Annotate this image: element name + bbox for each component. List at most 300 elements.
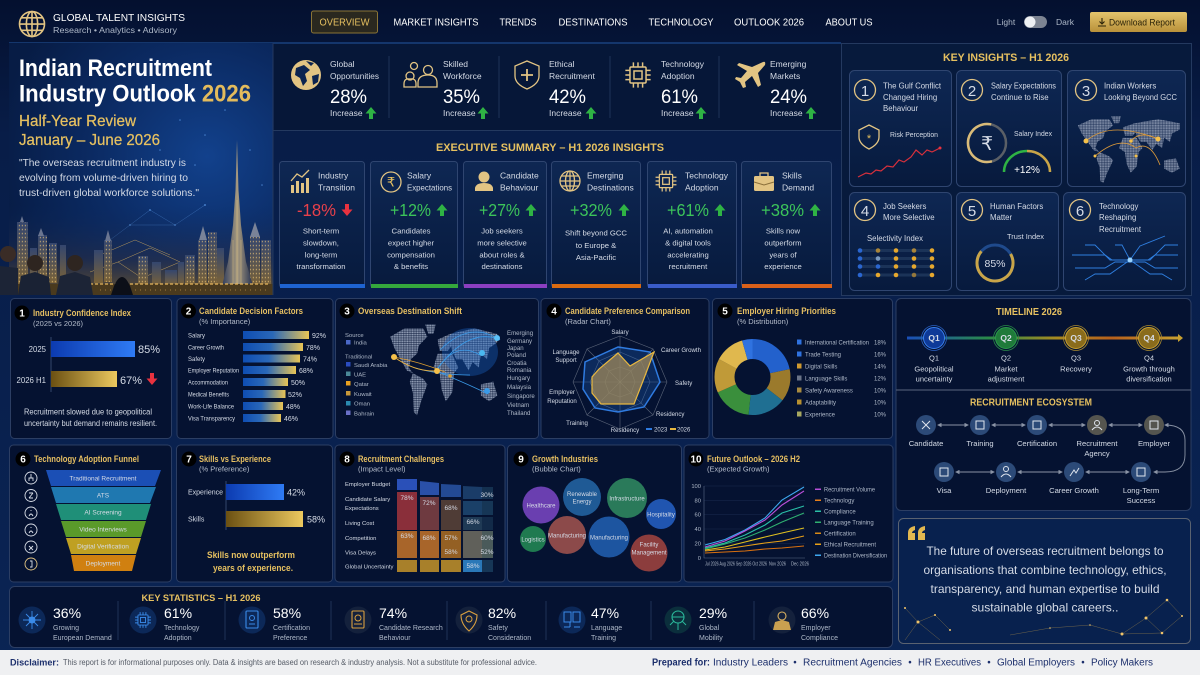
navigation menu: DESTINATIONS (558, 18, 628, 28)
stat: European demand: 36% (53, 605, 81, 621)
prepared for: HR Executives (918, 658, 981, 668)
panel 5: employer hiring priorities: (% Distribution) (737, 317, 789, 326)
panel 10: future outlook: 10 (690, 454, 702, 466)
panel 4: candidate preference comparison: 4 (551, 306, 557, 318)
timeline: Q3 (1070, 333, 1082, 343)
panel 1: industry confidence index: 1 (19, 308, 25, 320)
radar chart: Residency (656, 411, 685, 418)
heatmap bars: 30% (480, 492, 494, 499)
stat: employer compliance: Compliance (801, 635, 838, 642)
insight 6: technology reshaping: Technology (1099, 202, 1139, 211)
timeline: Q1 (929, 354, 939, 362)
exec card: skills demand: experience (764, 262, 802, 271)
line chart legend: Ethical Recruitment (824, 542, 876, 548)
insight 4: job seekers selective: Selectivity Index (867, 234, 923, 243)
stat: global mobility: 29% (699, 605, 727, 621)
donut legend: 14% (874, 364, 887, 370)
timeline heading: TIMELINE 2026 (996, 306, 1062, 318)
KPI: skilled workforce (404, 59, 488, 119)
heatmap bars: 68% (422, 535, 436, 542)
timeline: Market (995, 364, 1018, 374)
funnel stages: Deployment (86, 560, 121, 568)
insight 6: technology reshaping: Recruitment (1099, 225, 1142, 234)
horizontal bars: Medical Benefits (188, 392, 229, 398)
KPI: emerging markets: Emerging (770, 59, 807, 69)
insight 2: salary expectations: Salary Index (1014, 129, 1052, 138)
heatmap bars: 63% (400, 533, 414, 540)
radar chart: Training (566, 420, 588, 427)
funnel icons (25, 472, 37, 570)
ecosystem flow: Training (966, 439, 994, 448)
skills takeaway (207, 550, 295, 574)
panel 4: candidate preference comparison: Candidate Preference Comparison (565, 306, 690, 316)
line chart: 80 (695, 498, 701, 504)
insight 2: salary expectations: +12% (1014, 165, 1040, 176)
exec card: skills demand: +38% (761, 200, 804, 220)
line chart legend: Compliance (824, 510, 856, 516)
theme toggle: Dark (1056, 17, 1075, 27)
hero subtitle: Half-Year Review (19, 113, 136, 130)
ecosystem flow (909, 415, 1185, 505)
ecosystem flow: Visa (937, 486, 952, 495)
donut legend (797, 340, 887, 418)
donut legend: Trade Testing (805, 352, 841, 358)
exec card: salary expectations: Expectations (407, 182, 452, 192)
donut legend: 10% (874, 400, 887, 406)
horizontal bars: Salary (188, 334, 205, 340)
KPI: ethical recruitment: 42% (549, 86, 586, 108)
KPI: technology adoption (625, 59, 706, 119)
insight 4: job seekers selective: Job Seekers (883, 202, 926, 211)
bar 2025 (29, 341, 160, 357)
panel: timeline and ecosystem (896, 298, 1191, 510)
line chart: 40 (695, 527, 701, 533)
radar legend (646, 428, 691, 434)
panel 9: growth industries: 9 (518, 454, 524, 466)
hero subtitle (19, 113, 160, 149)
exec card: technology adoption: AI, automation (663, 226, 713, 236)
KPI: global opportunities (291, 59, 379, 119)
stat: language training: 47% (591, 605, 619, 621)
hero quote (19, 157, 199, 199)
horizontal bars (188, 331, 326, 423)
panel 10: future outlook: Future Outlook – 2026 H2 (707, 454, 800, 464)
line chart: Dec 2026 (791, 562, 809, 568)
ecosystem flow: Employer (1138, 439, 1171, 448)
source legend: Source (345, 333, 364, 339)
navigation menu: MARKET INSIGHTS (394, 18, 479, 28)
emerging list (507, 330, 535, 417)
insight 5: human factors: Human Factors (990, 202, 1043, 211)
timeline (907, 326, 1183, 384)
bubbles: Hospitality (647, 512, 675, 518)
header: logo and brand (20, 12, 185, 36)
timeline: Q3 (1071, 354, 1081, 362)
donut legend: International Certification (805, 340, 869, 346)
horizontal bars: 78% (306, 345, 320, 352)
panel 9: growth industries (508, 445, 682, 582)
emerging list: Thailand (507, 410, 530, 417)
exec card: industry transition: Industry (318, 170, 349, 180)
insight 4: job seekers selective (850, 192, 952, 290)
prepared for: Policy Makers (1091, 658, 1153, 668)
exec card: technology adoption: Adoption (685, 182, 719, 192)
panel 1: industry confidence index: uncertainty but demand remains resilient. (24, 419, 157, 428)
quote text: sustainable global careers.. (972, 600, 1118, 614)
prepared for (652, 658, 1153, 668)
line chart: 0 (698, 556, 701, 562)
heatmap bars: 58% (444, 549, 458, 556)
panel 7: skills vs experience: Skills (188, 516, 205, 524)
stat: technology adoption (130, 605, 200, 642)
horizontal bars: Accommodation (188, 380, 228, 386)
prepared for: Recruitment Agencies (803, 658, 902, 668)
stat: certification preference: 58% (273, 605, 301, 621)
horizontal bars: 74% (303, 356, 317, 364)
radar legend: 2026 (677, 428, 691, 434)
horizontal bars: Career Growth (188, 346, 224, 352)
panel 5: employer hiring priorities: Employer Hiring Priorities (737, 306, 836, 316)
ecosystem flow: Recruitment (1077, 439, 1118, 448)
panel 2: candidate decision factors: 2 (186, 306, 192, 318)
timeline: Q2 (1000, 333, 1012, 343)
stat: global mobility (664, 605, 727, 642)
theme toggle (997, 16, 1075, 28)
panel 3: overseas destination shift (336, 298, 538, 438)
hero star network (109, 109, 263, 241)
donut legend: Language Skills (805, 376, 847, 382)
header: logo and brand: GLOBAL TALENT INSIGHTS (53, 12, 185, 24)
panel 8: recruitment challenges: Competition (345, 536, 376, 542)
exec card: salary expectations: & benefits (394, 262, 428, 271)
panel 8: recruitment challenges: (Impact Level) (358, 464, 406, 474)
quote text: organisations that combine technology, ethics, (924, 563, 1166, 577)
prepared for: Industry Leaders (713, 658, 788, 668)
exec card: skills demand: Skills now (766, 226, 801, 236)
exec card: emerging destinations: Shift beyond GCC (565, 228, 627, 238)
KPI: skilled workforce: Workforce (443, 71, 482, 81)
download button: Download Report (1109, 18, 1176, 28)
insight 5: human factors: Trust Index (1007, 232, 1044, 241)
stat: certification preference (238, 605, 310, 642)
line chart legend: Technology (824, 498, 854, 504)
navigation menu: OUTLOOK 2026 (734, 18, 804, 28)
donut legend: 10% (874, 412, 887, 418)
KPI: emerging markets (735, 59, 816, 119)
timeline: Recovery (1060, 364, 1092, 374)
panel 10: future outlook: (Expected Growth) (707, 464, 770, 474)
panel 5: employer hiring priorities: 5 (722, 306, 728, 318)
exec card: technology adoption: Technology (685, 170, 729, 180)
ecosystem flow: Long-Term (1123, 486, 1159, 495)
insight 1: gulf conflict: Behaviour (883, 104, 919, 113)
heatmap bars: 68% (444, 505, 458, 512)
KPI: skilled workforce: Increase (443, 108, 476, 118)
stat: employer compliance: 66% (801, 605, 829, 621)
panel 3: overseas destination shift: 3 (344, 306, 350, 318)
exec card: skills demand: outperform (764, 238, 802, 248)
stat: safety consideration: Safety (488, 625, 508, 632)
donut legend: Experience (805, 412, 836, 418)
insight 5: human factors: 85% (984, 258, 1006, 270)
panel 1: industry confidence index (10, 298, 172, 438)
prepared for: • (1081, 658, 1085, 668)
radar chart: Language (552, 349, 580, 356)
stat: candidate research: 74% (379, 605, 407, 621)
stat: certification preference: Preference (273, 635, 307, 642)
timeline: adjustment (988, 374, 1025, 384)
insight 1: gulf conflict: * (867, 133, 872, 145)
exec card: candidate behaviour: Behaviour (500, 182, 538, 192)
panel 8: recruitment challenges: Candidate Salary (345, 497, 390, 503)
panel 7: skills vs experience: (% Preference) (199, 464, 250, 474)
panel: key statistics (10, 586, 892, 648)
donut legend: Adaptability (805, 400, 836, 406)
emerging list: Malaysia (507, 384, 532, 391)
horizontal bars: 52% (288, 392, 302, 399)
panel: hero: Industry Outlook 2026 (19, 80, 251, 108)
insight 6: technology reshaping: 6 (1076, 203, 1084, 220)
insight 6: technology reshaping: Reshaping (1099, 213, 1136, 222)
radar chart (547, 329, 701, 434)
insight 5: human factors (956, 192, 1058, 290)
insight 4: job seekers selective: 4 (861, 203, 869, 220)
donut chart (724, 349, 780, 405)
panel 8: recruitment challenges: Visa Delays (345, 550, 376, 556)
donut legend: Safety Awareness (805, 388, 853, 394)
panel: closing quote (898, 518, 1190, 644)
insight 2: salary expectations (956, 70, 1062, 186)
insight 3: indian workers map (1068, 70, 1186, 186)
exec card: salary expectations (370, 162, 458, 288)
exec card: skills demand: Skills (782, 170, 802, 180)
insight 3: indian workers map: 3 (1082, 83, 1090, 100)
disclaimer: Disclaimer: (10, 658, 59, 668)
exec card: industry transition: -18% (297, 200, 336, 220)
ecosystem flow: Agency (1084, 449, 1110, 458)
bar 2025: 2025 (29, 345, 47, 354)
panel 1: industry confidence index: (2025 vs 2026) (33, 319, 84, 328)
horizontal bars: 50% (291, 380, 305, 387)
heatmap bars: 66% (466, 519, 480, 526)
exec card: candidate behaviour: Job seekers (481, 226, 523, 236)
insight 1: gulf conflict (850, 70, 952, 186)
stat: safety consideration (456, 605, 531, 642)
line chart: 20 (695, 542, 701, 548)
radar chart: Salary (611, 329, 630, 336)
line chart: Jul 2026 Aug 2026 Sep 2026 Oct 2026 (705, 562, 767, 568)
panel 7: skills vs experience: 7 (186, 454, 192, 466)
KPI: technology adoption: Increase (661, 108, 694, 118)
prepared for: Global Employers (997, 658, 1075, 668)
insight 1: gulf conflict: 1 (861, 83, 869, 100)
stat: safety consideration: Consideration (488, 635, 531, 642)
exec card: emerging destinations: Destinations (587, 182, 634, 192)
insight 2: salary expectations: ₹ (981, 134, 993, 155)
exec card: candidate behaviour: more selective (477, 238, 527, 248)
line chart legend: Recruitment Volume (824, 488, 876, 494)
panel 3: overseas destination shift: Overseas Destination Shift (358, 306, 462, 316)
insight 3: indian workers map: Indian Workers (1104, 82, 1156, 90)
emerging list: Poland (507, 352, 526, 359)
funnel stages: Digital Verification (77, 544, 129, 550)
ecosystem flow: Deployment (986, 486, 1027, 495)
bubbles: Renewable (567, 492, 598, 498)
hero quote: "The overseas recruitment industry is (19, 157, 186, 169)
panel 6: technology adoption funnel: Technology Adoption Funnel (34, 454, 139, 464)
source legend: India (354, 340, 367, 346)
exec card: industry transition: Short-term (303, 226, 339, 236)
timeline: Q4 (1143, 333, 1155, 343)
KPI: emerging markets: 24% (770, 86, 807, 108)
exec card: salary expectations: Salary (407, 170, 432, 180)
KPI: technology adoption: Adoption (661, 71, 695, 81)
heatmap bars: 57% (444, 535, 458, 542)
source legend: UAE (354, 372, 366, 378)
exec card: technology adoption: & digital tools (665, 238, 711, 248)
timeline: Q4 (1144, 354, 1154, 362)
exec card: technology adoption: accelerating (667, 250, 709, 260)
KPI: emerging markets: Markets (770, 71, 800, 81)
exec card: industry transition: slowdown, (303, 238, 339, 248)
stat: safety consideration: 82% (488, 605, 516, 621)
donut legend: 12% (874, 376, 887, 382)
exec card: emerging destinations (552, 162, 641, 288)
ecosystem flow: Career Growth (1049, 486, 1099, 495)
exec card: salary expectations: ₹ (387, 174, 395, 190)
heatmap bars (397, 479, 494, 572)
donut legend: Digital Skills (805, 364, 837, 370)
panel 7: skills vs experience: Skills vs Experience (199, 454, 271, 464)
insight 1: gulf conflict: The Gulf Conflict (883, 82, 942, 90)
bar skills: 58% (307, 514, 325, 524)
panel 8: recruitment challenges: 8 (344, 454, 350, 466)
theme toggle: Light (997, 17, 1016, 27)
source legend: Oman (354, 402, 370, 408)
line chart legend: Language Training (824, 520, 874, 526)
panel 5: employer hiring priorities (712, 298, 892, 438)
source legend: Kuwait (354, 392, 372, 398)
bubbles: Healthcare (526, 504, 556, 510)
insight 1: gulf conflict: Risk Perception (890, 130, 938, 139)
emerging list: Vietnam (507, 402, 529, 409)
timeline: Growth through (1123, 364, 1175, 374)
panel 4: candidate preference comparison (541, 298, 709, 438)
hero quote: evolving from volume-driven hiring to (19, 172, 188, 184)
skills takeaway: Skills now outperform (207, 550, 295, 561)
prepared for: • (987, 658, 991, 668)
panel 2: candidate decision factors: Candidate Decision Factors (199, 306, 303, 316)
stat: European demand (18, 605, 112, 642)
exec card: emerging destinations: +32% (570, 200, 612, 220)
KPI: skilled workforce: Skilled (443, 59, 468, 69)
stat: technology adoption: 61% (164, 605, 192, 621)
panel 4: candidate preference comparison: (Radar Chart) (565, 317, 611, 326)
panel: key insights (842, 44, 1192, 296)
source legend: Bahrain (354, 412, 374, 418)
insight 6: technology reshaping (1064, 192, 1186, 290)
exec card: candidate behaviour (464, 162, 547, 288)
people silhouettes (0, 246, 133, 295)
hero title: Indian Recruitment (19, 55, 212, 82)
radar chart: Residency (611, 427, 640, 434)
KPI: technology adoption: Technology (661, 59, 705, 69)
bubbles: Energy (572, 500, 592, 506)
panel 10: future outlook (684, 445, 893, 582)
exec card: skills demand (742, 162, 832, 288)
insight 5: human factors: 5 (968, 203, 976, 220)
exec card: industry transition: Transition (318, 182, 355, 192)
exec card: industry transition: transformation (296, 262, 346, 271)
key statistics heading: KEY STATISTICS – H1 2026 (142, 593, 260, 604)
KPI: ethical recruitment: Ethical (549, 59, 575, 69)
ecosystem flow: Success (1127, 496, 1156, 505)
timeline: Q2 (1001, 354, 1011, 362)
quote text (924, 544, 1166, 614)
heatmap bars: 78% (400, 495, 414, 502)
quote text: The future of overseas recruitment belongs to (926, 544, 1164, 558)
donut legend: 16% (874, 352, 887, 358)
emerging list: Singapore (507, 393, 535, 400)
insight 2: salary expectations: 2 (968, 83, 976, 100)
line chart (691, 484, 809, 568)
prepared for: • (793, 658, 797, 668)
panel 7: skills vs experience: Experience (188, 490, 223, 496)
funnel stages: ATS (97, 492, 110, 500)
KPI: skilled workforce: 35% (443, 86, 480, 108)
exec card: technology adoption (648, 162, 737, 288)
stat: European demand: European Demand (53, 635, 112, 642)
header: logo and brand: Research • Analytics • Advisory (53, 26, 178, 35)
navigation menu: TECHNOLOGY (648, 18, 714, 28)
stat: European demand: Growing (53, 625, 79, 632)
panel 8: recruitment challenges: Recruitment Challenges (358, 454, 444, 464)
emerging list: Emerging (507, 330, 533, 337)
panel 8: recruitment challenges: Global Uncertainty (345, 564, 394, 570)
panel 6: technology adoption funnel: 6 (20, 454, 26, 466)
panel: hero (0, 43, 273, 295)
bar 2025: 85% (138, 344, 160, 356)
panel 7: skills vs experience (176, 445, 332, 582)
emerging list: Romania (507, 367, 532, 374)
exec card: salary expectations: compensation (387, 250, 435, 260)
funnel stages (46, 470, 161, 571)
ecosystem flow: Candidate (909, 439, 943, 448)
panel 8: recruitment challenges: Employer Budget (345, 482, 391, 488)
bar 2026 H1 (17, 371, 158, 387)
exec card: salary expectations: Candidates (392, 226, 431, 236)
bar 2026 H1: 67% (120, 375, 142, 387)
hero subtitle: January – June 2026 (19, 132, 160, 149)
insight 1: gulf conflict: Changed Hiring (883, 93, 937, 102)
horizontal bars: 92% (312, 333, 326, 340)
line chart legend (815, 488, 887, 560)
KPI strip (273, 43, 841, 295)
bubbles: Manufacturing (548, 534, 586, 540)
exec card: salary expectations: expect higher (388, 238, 435, 248)
bar skills (226, 511, 325, 527)
panel 9: growth industries: (Bubble Chart) (532, 464, 581, 474)
stat: global mobility: Mobility (699, 635, 723, 642)
quote mark (908, 526, 925, 540)
line chart: 60 (695, 512, 701, 518)
stat: employer compliance (768, 605, 838, 642)
exec card: industry transition: long-term (305, 250, 337, 260)
KPI: global opportunities: Opportunities (330, 71, 379, 81)
panel 1: industry confidence index: Industry Confidence Index (33, 308, 131, 318)
heatmap bars: 60% (480, 535, 494, 542)
emerging list: Hungary (507, 375, 531, 382)
